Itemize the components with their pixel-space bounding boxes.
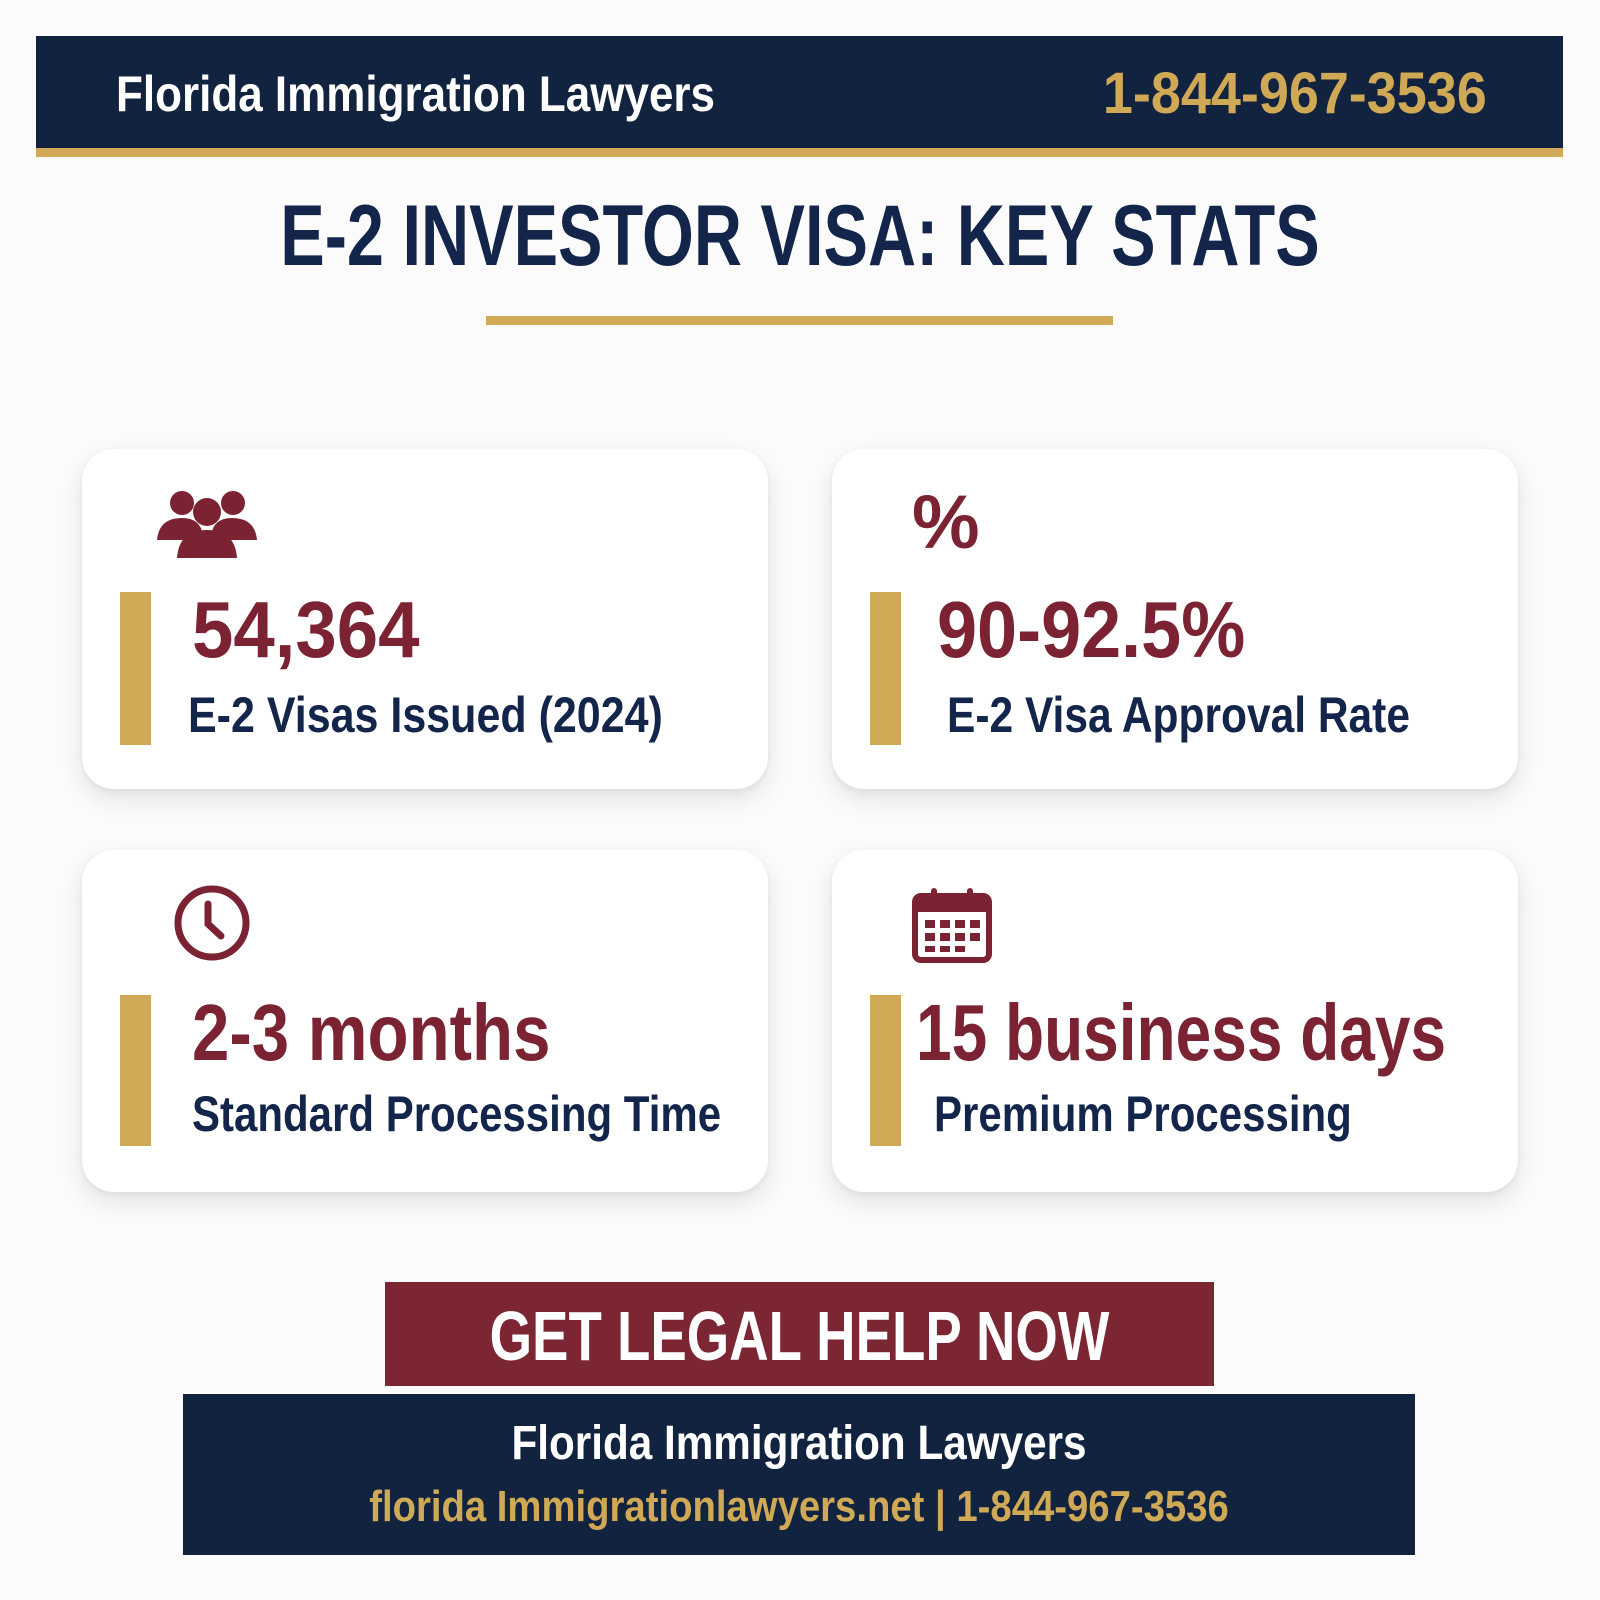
header phone: 1-844-967-3536 [1103,61,1487,126]
footer panel [183,1394,1415,1555]
stat label: E-2 Visa Approval Rate [947,687,1410,743]
footer contact: florida Immigrationlawyers.net | 1-844-967-3536 [369,1482,1229,1531]
footer firm name: Florida Immigration Lawyers [511,1417,1087,1470]
stat number: 54,364 [192,585,420,674]
header bar [36,36,1563,157]
card: premium processing [832,850,1518,1192]
icon: percent: % [912,480,980,565]
CTA text: GET LEGAL HELP NOW [490,1297,1109,1375]
CTA button [385,1282,1214,1386]
stat label: E-2 Visas Issued (2024) [188,687,663,743]
card: standard processing [82,850,768,1192]
icon: clock [174,886,250,960]
stat number: 2-3 months [192,988,550,1077]
accent bar [120,995,151,1146]
card: visas issued [82,449,768,789]
stat number: 15 business days [916,988,1446,1077]
accent bar [870,592,901,745]
title underline [486,316,1113,325]
title: E-2 INVESTOR VISA: KEY STATS [280,188,1320,284]
stat number: 90-92.5% [937,585,1245,674]
accent bar [870,995,901,1146]
stat label: Premium Processing [934,1086,1352,1142]
accent bar [120,592,151,745]
icon: calendar [912,888,992,963]
card: approval rate [832,449,1518,789]
header firm name: Florida Immigration Lawyers [116,66,715,122]
stat label: Standard Processing Time [192,1086,721,1142]
icon: people [157,491,257,558]
